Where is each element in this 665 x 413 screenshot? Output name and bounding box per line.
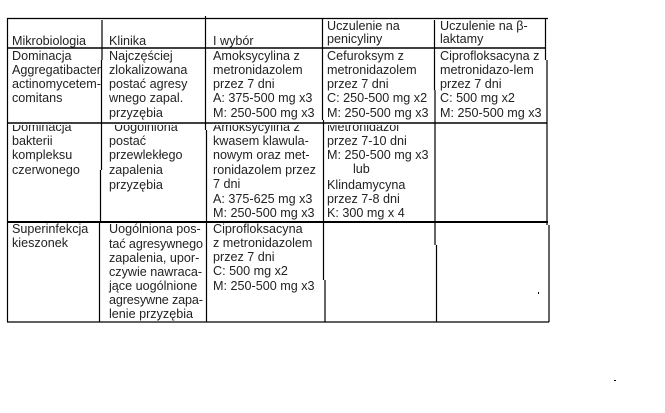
row 2: red complex dominance: K: 300 mg x 4 xyxy=(327,206,405,220)
row 2: red complex dominance: 7 dni xyxy=(213,177,240,191)
row 2: red complex dominance: A: 375-625 mg x3 xyxy=(213,192,312,206)
row 1: Aggregatibacter dominance: postać agresy xyxy=(109,77,188,91)
header row: I wybór xyxy=(213,34,254,48)
row 2: red complex dominance: bakterii xyxy=(12,134,53,148)
header row: Klinika xyxy=(109,34,146,48)
header row: penicyliny xyxy=(327,32,383,46)
row 2: red complex dominance: przez 7-8 dni xyxy=(327,192,400,206)
row 1: Aggregatibacter dominance: M: 250-500 mg x3 xyxy=(440,106,542,120)
row 3: pocket superinfection: z metronidazolem xyxy=(213,236,312,250)
row 1: Aggregatibacter dominance: wnego zapal. xyxy=(108,91,183,105)
row 2: red complex dominance: przewlekłego xyxy=(109,148,183,162)
header row: Uczulenie na β- xyxy=(440,19,528,33)
row 3: pocket superinfection: M: 250-500 mg x3 xyxy=(213,279,315,293)
row 2: red complex dominance: ronidazolem przez xyxy=(213,163,316,177)
row 2: red complex dominance: zapalenia xyxy=(109,163,163,177)
row 1: Aggregatibacter dominance: M: 250-500 mg x3 xyxy=(327,106,429,120)
row 3: pocket superinfection: agresywne zapa- xyxy=(109,293,203,307)
row 1: Aggregatibacter dominance: zlokalizowana xyxy=(109,63,187,77)
row 1: Aggregatibacter dominance: Cefuroksym z xyxy=(327,49,404,63)
row 3: pocket superinfection: Superinfekcja xyxy=(12,222,88,236)
row 2: red complex dominance: lub xyxy=(353,162,370,176)
row 2: red complex dominance: przyzębia xyxy=(109,178,163,192)
row 2: red complex dominance xyxy=(12,120,429,220)
row 1: Aggregatibacter dominance: Najczęściej xyxy=(109,49,173,63)
row 2: red complex dominance: przez 7-10 dni xyxy=(327,134,407,148)
row 1: Aggregatibacter dominance: comitans xyxy=(12,91,62,105)
row 2: red complex dominance: Dominacja xyxy=(12,120,72,134)
row 1: Aggregatibacter dominance: przez 7 dni xyxy=(327,77,389,91)
row 3: pocket superinfection: lenie przyzębia xyxy=(109,307,193,321)
row 3: pocket superinfection xyxy=(12,222,315,321)
row 1: Aggregatibacter dominance: przez 7 dni xyxy=(213,77,275,91)
row 3: pocket superinfection: C: 500 mg x2 xyxy=(213,264,288,278)
row 2: red complex dominance: M: 250-500 mg x3 xyxy=(213,206,315,220)
header row: laktamy xyxy=(440,32,484,46)
row 1: Aggregatibacter dominance: C: 500 mg x2 xyxy=(440,91,515,105)
header row: Mikrobiologia xyxy=(12,34,86,48)
row 1: Aggregatibacter dominance: przez 7 dni xyxy=(440,77,502,91)
row 2: red complex dominance: postać xyxy=(109,134,146,148)
header row xyxy=(12,19,528,48)
row 1: Aggregatibacter dominance: Amoksycylina z xyxy=(213,49,300,63)
row 1: Aggregatibacter dominance: metronidazo-lem xyxy=(440,63,534,77)
row 1: Aggregatibacter dominance: metronidazolem xyxy=(213,63,303,77)
row 1: Aggregatibacter dominance: actinomycetem- xyxy=(12,77,101,91)
row 2: red complex dominance: Klindamycyna xyxy=(327,178,405,192)
row 1: Aggregatibacter dominance: metronidazolem xyxy=(327,63,417,77)
row 2: red complex dominance: Uogólniona xyxy=(114,120,178,134)
row 3: pocket superinfection: przez 7 dni xyxy=(213,250,275,264)
row 1: Aggregatibacter dominance xyxy=(12,49,542,120)
row 3: pocket superinfection: kieszonek xyxy=(12,236,69,250)
row 1: Aggregatibacter dominance: Ciprofloksacyna z xyxy=(440,49,539,63)
row 1: Aggregatibacter dominance: A: 375-500 mg x3 xyxy=(213,91,312,105)
stray dot marks xyxy=(538,292,616,381)
row 1: Aggregatibacter dominance: Aggregatibacter xyxy=(12,63,101,77)
row 2: red complex dominance: kwasem klawula- xyxy=(213,134,309,148)
row 2: red complex dominance: nowym oraz met- xyxy=(213,148,310,162)
row 3: pocket superinfection: zapalenia, upor- xyxy=(109,251,199,265)
row 3: pocket superinfection: czywie nawraca- xyxy=(109,265,202,279)
row 1: Aggregatibacter dominance: M: 250-500 mg x3 xyxy=(213,106,315,120)
row 1: Aggregatibacter dominance: Dominacja xyxy=(12,49,72,63)
row 3: pocket superinfection: jące uogólnione xyxy=(108,279,197,293)
row 1: Aggregatibacter dominance: przyzębia xyxy=(109,106,163,120)
header row: Uczulenie na xyxy=(327,19,400,33)
row 2: red complex dominance: M: 250-500 mg x3 xyxy=(327,148,429,162)
row 2: red complex dominance: kompleksu xyxy=(12,148,72,162)
row 2: red complex dominance: Metronidazol xyxy=(327,120,399,134)
row 2: red complex dominance: czerwonego xyxy=(12,163,80,177)
row 3: pocket superinfection: Uogólniona pos- xyxy=(109,222,201,236)
row 2: red complex dominance: Amoksycylina z xyxy=(213,120,300,134)
row 3: pocket superinfection: tać agresywnego xyxy=(109,237,203,251)
table grid lines xyxy=(7,16,549,322)
row 3: pocket superinfection: Ciprofloksacyna xyxy=(213,222,303,236)
row 1: Aggregatibacter dominance: C: 250-500 mg x2 xyxy=(327,91,427,105)
